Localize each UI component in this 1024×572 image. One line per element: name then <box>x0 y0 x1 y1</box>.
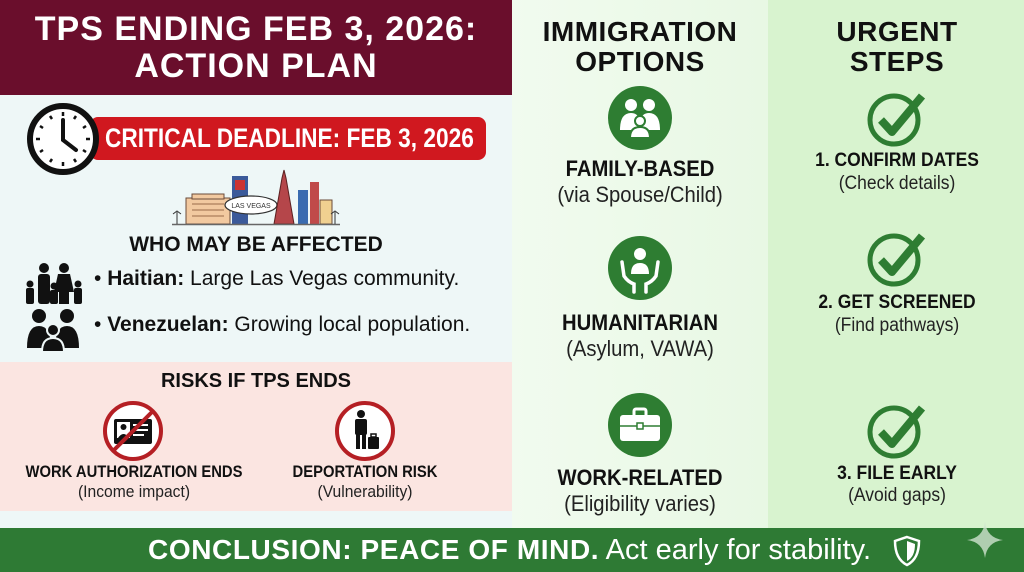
left column background <box>0 95 512 528</box>
title <box>0 0 512 95</box>
icon: las vegas skyline <box>172 170 340 226</box>
heading: immigration options <box>543 16 737 77</box>
step 3 <box>837 406 957 506</box>
heading: urgent steps <box>836 16 958 77</box>
risk: deportation <box>293 401 438 501</box>
step 2: 2. GET SCREENED <box>818 292 976 313</box>
step 1 <box>815 94 979 194</box>
heading: immigration options: OPTIONS <box>575 46 705 77</box>
option: humanitarian <box>562 236 718 361</box>
text: • Haitian: Large Las Vegas community. <box>94 267 459 290</box>
red pill: CRITICAL DEADLINE: FEB 3, 2026 <box>105 123 474 153</box>
title: TPS ENDING FEB 3, 2026: <box>35 10 477 48</box>
icon: las vegas skyline: LAS VEGAS <box>231 203 271 210</box>
option: humanitarian: (Asylum, VAWA) <box>566 336 714 361</box>
icon: traveler <box>335 401 395 461</box>
option: family-based: FAMILY-BASED <box>566 156 714 181</box>
option: family-based: (via Spouse/Child) <box>557 182 723 207</box>
affected: venezuelan <box>27 309 470 351</box>
step 3: 3. FILE EARLY <box>837 463 957 484</box>
option: family-based <box>557 86 723 207</box>
option: humanitarian: HUMANITARIAN <box>562 310 718 335</box>
affected: haitian <box>26 263 459 304</box>
text: • Venezuelan: Growing local population. <box>94 313 470 336</box>
middle column background <box>512 0 768 528</box>
icon: briefcase <box>608 393 672 457</box>
footer: conclusion <box>0 528 1024 572</box>
option: work-related: (Eligibility varies) <box>564 491 716 516</box>
step 2 <box>818 234 976 336</box>
icon: group <box>27 309 79 351</box>
footer: conclusion: CONCLUSION: PEACE OF MIND. Act early for stability. <box>148 534 871 566</box>
red pill <box>90 117 486 160</box>
deadline banner <box>27 103 486 175</box>
icon: hands <box>608 236 672 300</box>
step 1: (Check details) <box>839 173 955 194</box>
panel: risks <box>0 362 512 511</box>
risk: deportation: DEPORTATION RISK <box>293 462 437 481</box>
icon: sparkle <box>967 524 1003 558</box>
right column background <box>768 0 1024 528</box>
icon: family circle <box>608 86 672 150</box>
icon: check <box>868 94 925 146</box>
step 2: (Find pathways) <box>835 315 959 336</box>
heading: urgent steps: URGENT <box>836 16 958 47</box>
icon: clock <box>27 103 99 175</box>
icon: check <box>868 406 925 458</box>
heading: who may be affected: WHO MAY BE AFFECTED <box>129 233 383 256</box>
heading: risks: RISKS IF TPS ENDS <box>161 370 351 392</box>
icon: shield <box>894 536 920 566</box>
step 3: (Avoid gaps) <box>848 485 946 506</box>
option: work-related: WORK-RELATED <box>558 465 722 490</box>
risk: work authorization: WORK AUTHORIZATION ENDS <box>26 462 242 481</box>
title: ACTION PLAN <box>134 47 378 85</box>
risk: work authorization <box>26 401 242 501</box>
heading: immigration options: IMMIGRATION <box>543 16 737 47</box>
icon: family <box>26 263 82 304</box>
option: work-related <box>558 393 722 516</box>
risk: deportation: (Vulnerability) <box>317 482 413 501</box>
icon: check <box>868 234 925 286</box>
risk: work authorization: (Income impact) <box>78 482 190 501</box>
icon: no id card <box>103 401 163 461</box>
step 1: 1. CONFIRM DATES <box>815 150 979 171</box>
heading: urgent steps: STEPS <box>850 46 944 77</box>
